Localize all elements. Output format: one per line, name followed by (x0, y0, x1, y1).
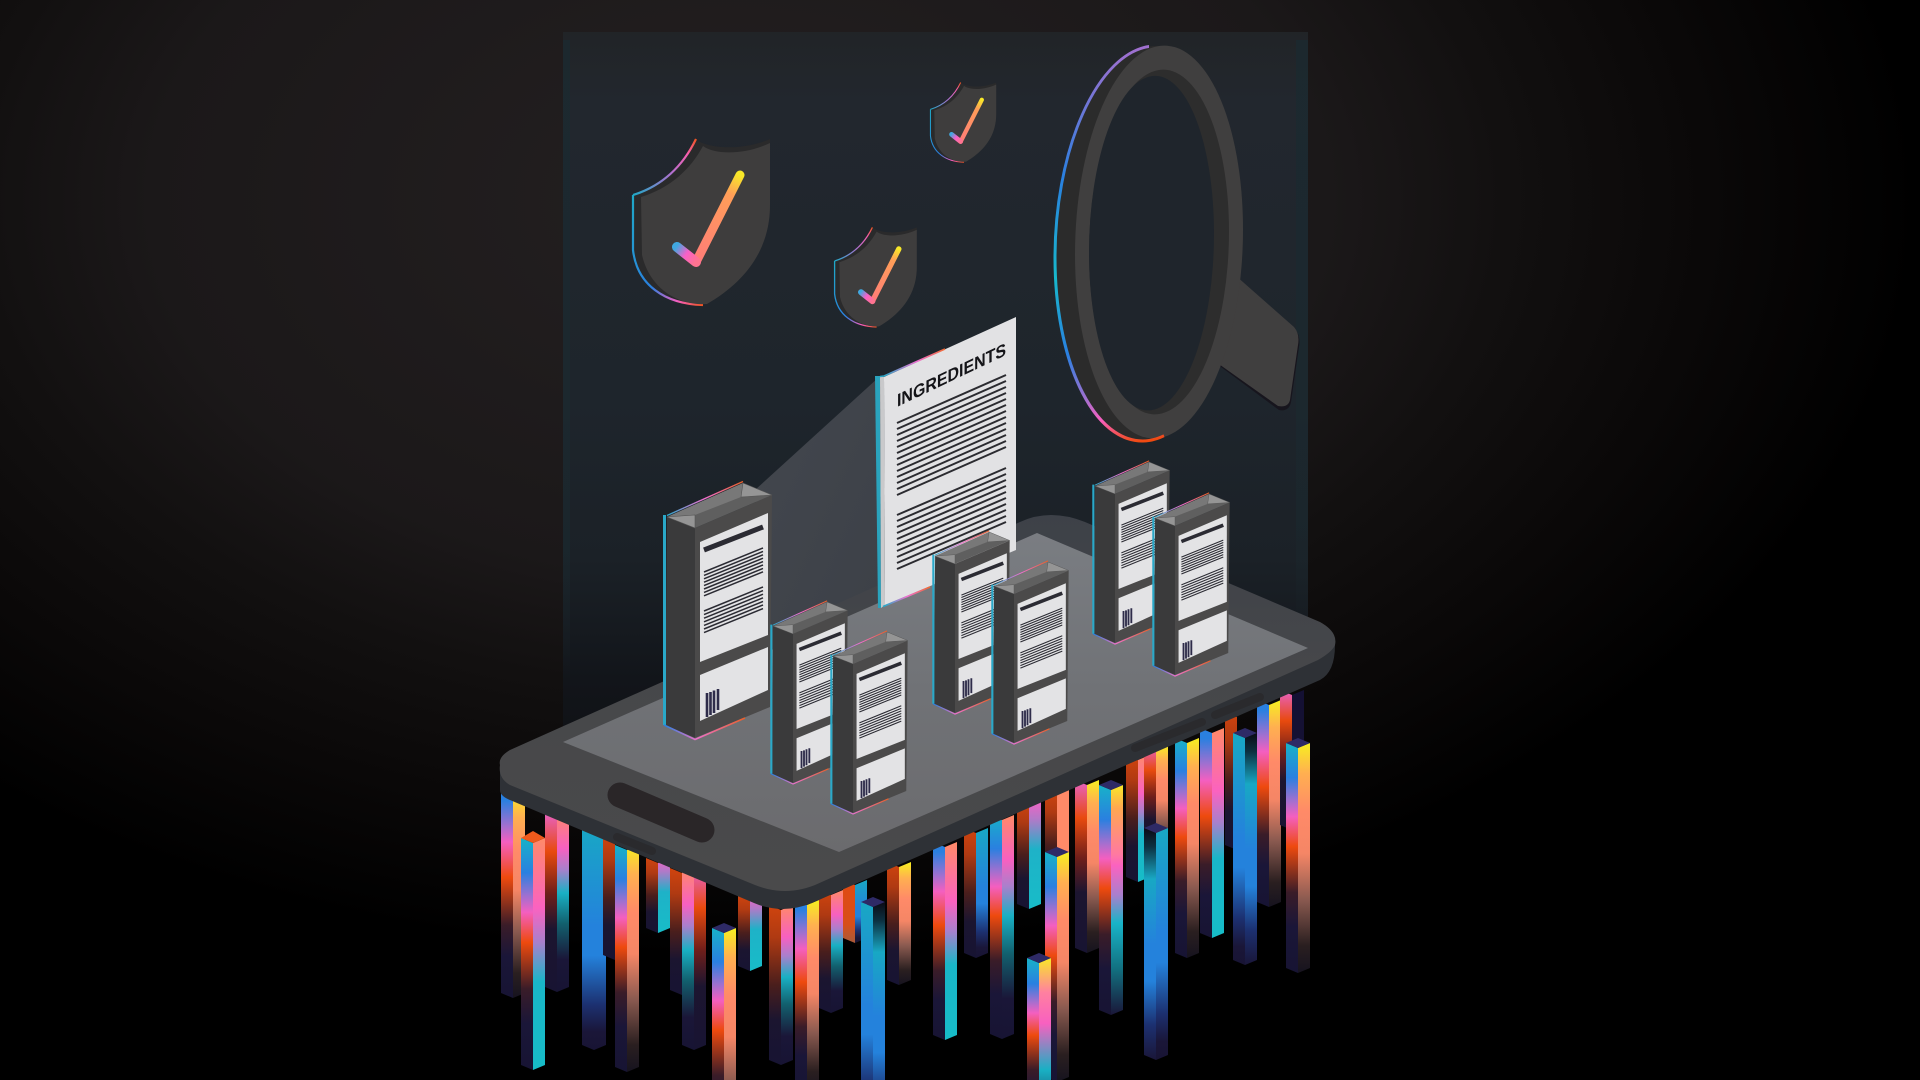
speaker slots (617, 697, 1260, 851)
bar (1075, 780, 1099, 953)
smartphone (500, 515, 1335, 909)
bar (990, 815, 1014, 1039)
product box 4 (933, 531, 1010, 714)
bar (545, 812, 569, 992)
phone body (500, 515, 1335, 891)
bar (933, 842, 957, 1040)
bar (1144, 745, 1168, 860)
bar (682, 868, 706, 1050)
home button (620, 795, 702, 830)
capped bar (1233, 728, 1257, 965)
bar (1280, 690, 1304, 830)
capped bar (712, 923, 736, 1080)
bar (1175, 738, 1199, 958)
capped bar (1144, 823, 1168, 1060)
bar (1200, 728, 1224, 938)
bar (501, 790, 525, 998)
ingredients sheet (875, 317, 1016, 608)
capped bar (615, 845, 639, 1072)
product box 5 (992, 561, 1069, 744)
bar (819, 890, 843, 1013)
icon: large shield (633, 139, 770, 305)
ingredient lines (897, 375, 1006, 569)
product box large (664, 482, 772, 740)
capped bar (1045, 847, 1069, 1080)
bar (964, 828, 988, 958)
bar (1045, 790, 1069, 900)
product box 3 (831, 631, 908, 814)
backdrop panel (563, 32, 1308, 735)
magnifier ring (1055, 32, 1243, 455)
light beam (755, 378, 882, 665)
bar (795, 900, 819, 1080)
bar (1257, 700, 1281, 907)
icon: small shield (930, 83, 996, 162)
product box 2 (771, 601, 848, 784)
capped bar (1027, 953, 1051, 1080)
capped bar (861, 897, 885, 1080)
phone screen (563, 533, 1308, 852)
bar (1017, 800, 1041, 909)
bar (843, 880, 867, 943)
bar (603, 835, 615, 960)
bar (738, 895, 762, 971)
bar (670, 868, 682, 995)
sheet title: INGREDIENTS (897, 340, 1006, 412)
phone side (500, 622, 1335, 909)
icon: magnifying glass (1055, 32, 1300, 455)
bar (1225, 712, 1237, 850)
icon: medium shield (835, 227, 917, 327)
bar (887, 862, 911, 985)
bar (582, 825, 606, 1050)
magnifier handle (1216, 275, 1300, 410)
product box 6 (1093, 461, 1170, 644)
bar (769, 905, 793, 1065)
light bars under the phone (501, 690, 1310, 1080)
bar (646, 858, 670, 933)
bar with orange cap (521, 831, 545, 1070)
product box 7 (1153, 493, 1230, 676)
bar (1126, 755, 1150, 882)
capped bar (1286, 738, 1310, 973)
capped bar (1099, 780, 1123, 1015)
